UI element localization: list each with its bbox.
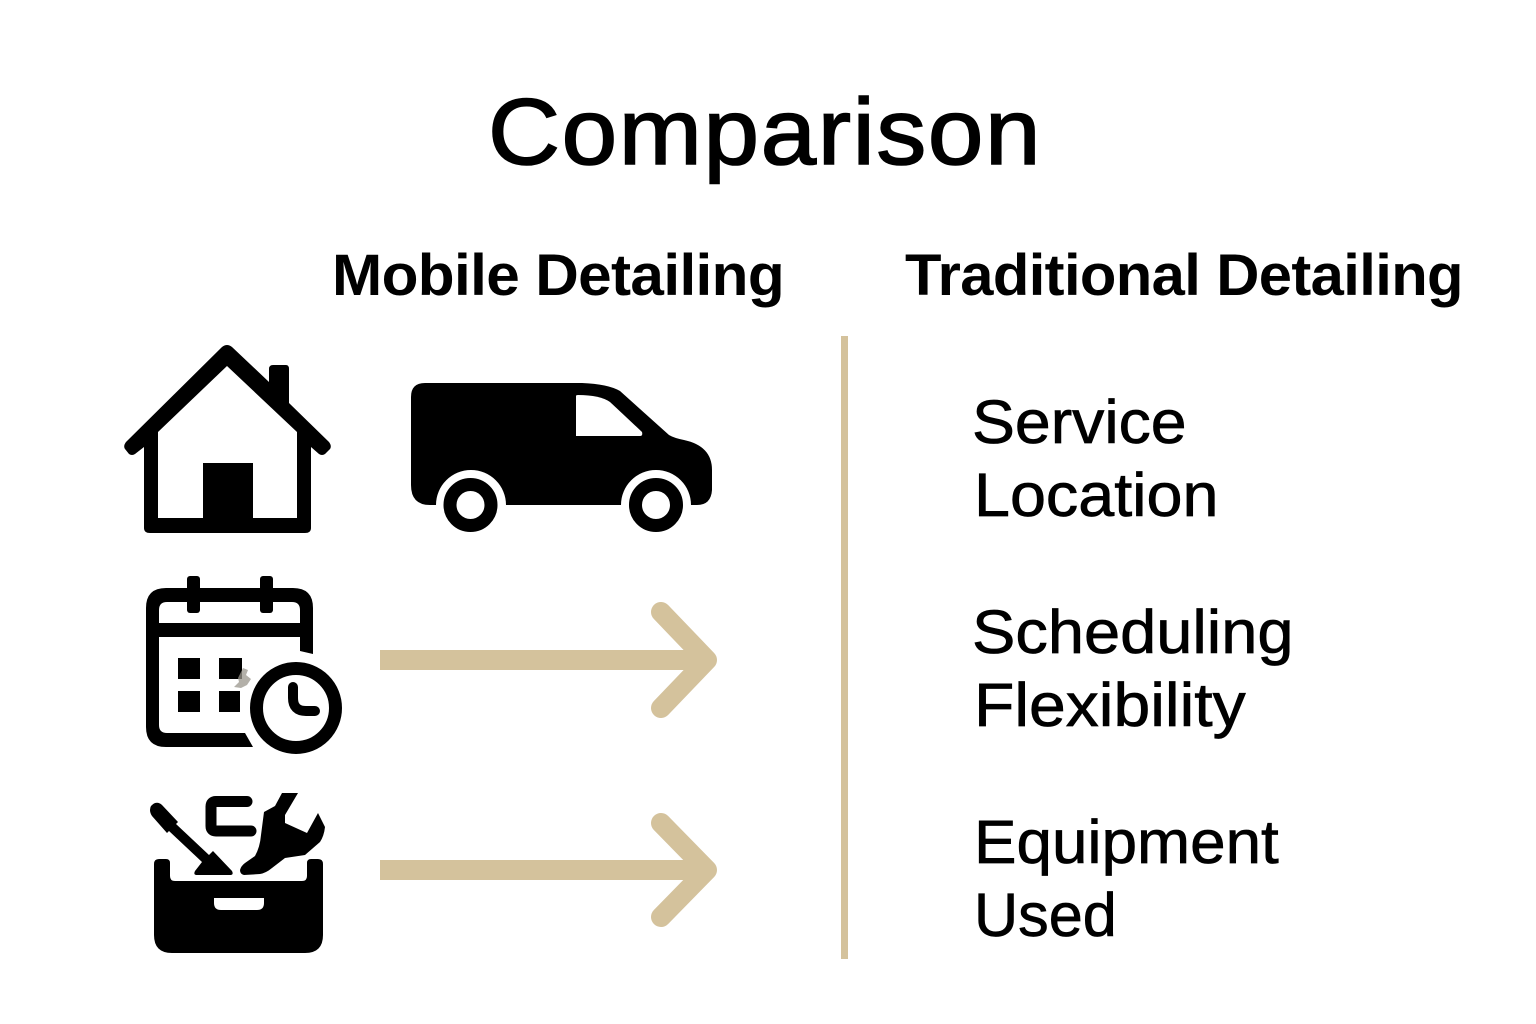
icon: toolbox xyxy=(150,793,325,953)
label: equipment used: Used xyxy=(974,881,1117,949)
title: Comparison xyxy=(488,79,1042,184)
arrow: scheduling xyxy=(380,612,707,708)
label: equipment used xyxy=(974,808,1279,949)
label: scheduling flexibility: Flexibility xyxy=(974,671,1246,739)
label: service location: Location xyxy=(974,461,1218,529)
heading: traditional detailing: Traditional Detailing xyxy=(905,243,1463,308)
arrow: equipment xyxy=(380,823,707,917)
label: service location: Service xyxy=(972,388,1187,456)
label: equipment used: Equipment xyxy=(974,808,1279,876)
label: service location xyxy=(972,388,1218,529)
divider line xyxy=(841,336,848,959)
label: scheduling flexibility: Scheduling xyxy=(972,598,1293,666)
icon: van xyxy=(411,383,712,526)
icon: calendar with clock xyxy=(146,576,336,748)
label: scheduling flexibility xyxy=(972,598,1293,739)
icon: house xyxy=(124,345,331,533)
heading: mobile detailing: Mobile Detailing xyxy=(332,243,784,308)
